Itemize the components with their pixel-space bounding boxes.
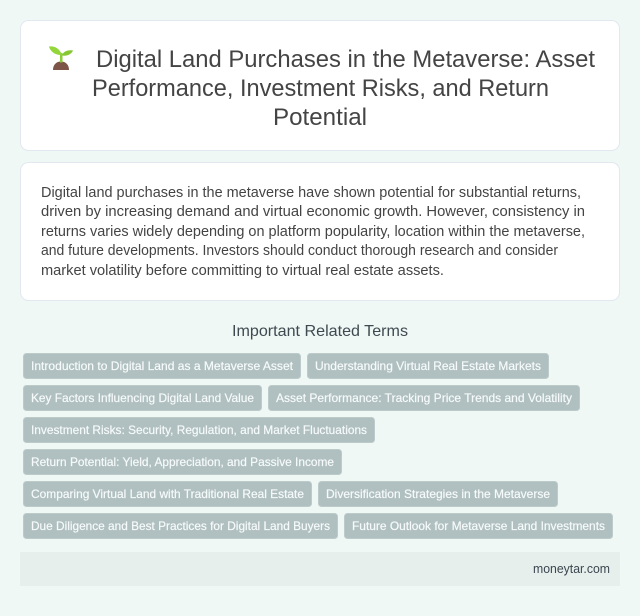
panel: related term tags <box>24 354 612 538</box>
tag: Key Factors Influencing Digital Land Value <box>31 391 254 405</box>
title: Digital Land Purchases in the Metaverse: Asset <box>96 46 595 73</box>
tag <box>24 482 312 506</box>
title: Performance, Investment Risks, and Return <box>92 75 549 102</box>
heading: important related terms: Important Related Terms <box>232 323 408 340</box>
tag: Understanding Virtual Real Estate Markets <box>315 359 541 373</box>
title: Potential <box>273 104 367 131</box>
tag: Investment Risks: Security, Regulation, and Market Fluctuations <box>31 423 367 437</box>
summary text: driven by increasing demand and virtual economic growth. However, consistency in <box>41 204 585 220</box>
tag <box>268 386 580 410</box>
tag: Future Outlook for Metaverse Land Investments <box>352 519 605 533</box>
tag <box>24 386 262 410</box>
footer: moneytar.com <box>533 562 610 576</box>
summary text: and future developments. Investors should conduct thorough research and consider <box>41 243 558 259</box>
tag: Due Diligence and Best Practices for Digital Land Buyers <box>31 519 330 533</box>
tag: Return Potential: Yield, Appreciation, and Passive Income <box>31 455 334 469</box>
tag <box>24 450 342 474</box>
tag: Introduction to Digital Land as a Metaverse Asset <box>31 359 294 373</box>
tag: Comparing Virtual Land with Traditional Real Estate <box>31 487 304 501</box>
icon: sprout <box>49 46 73 70</box>
summary text: market volatility before committing to virtual real estate assets. <box>41 263 444 279</box>
panel: summary card <box>20 162 620 300</box>
tag: Diversification Strategies in the Metaverse <box>326 487 550 501</box>
tag <box>24 418 374 442</box>
summary text: Digital land purchases in the metaverse have shown potential for substantial returns, <box>41 185 581 201</box>
panel: title card <box>20 20 620 150</box>
tag <box>308 354 548 378</box>
footer <box>20 552 620 586</box>
tag: Asset Performance: Tracking Price Trends and Volatility <box>276 391 572 405</box>
title <box>92 46 595 131</box>
summary text <box>41 185 585 279</box>
tag <box>318 482 558 506</box>
tag <box>24 514 338 538</box>
summary text: returns varies widely depending on platform popularity, location within the metaverse, <box>41 224 585 240</box>
tag <box>344 514 612 538</box>
tag <box>24 354 300 378</box>
